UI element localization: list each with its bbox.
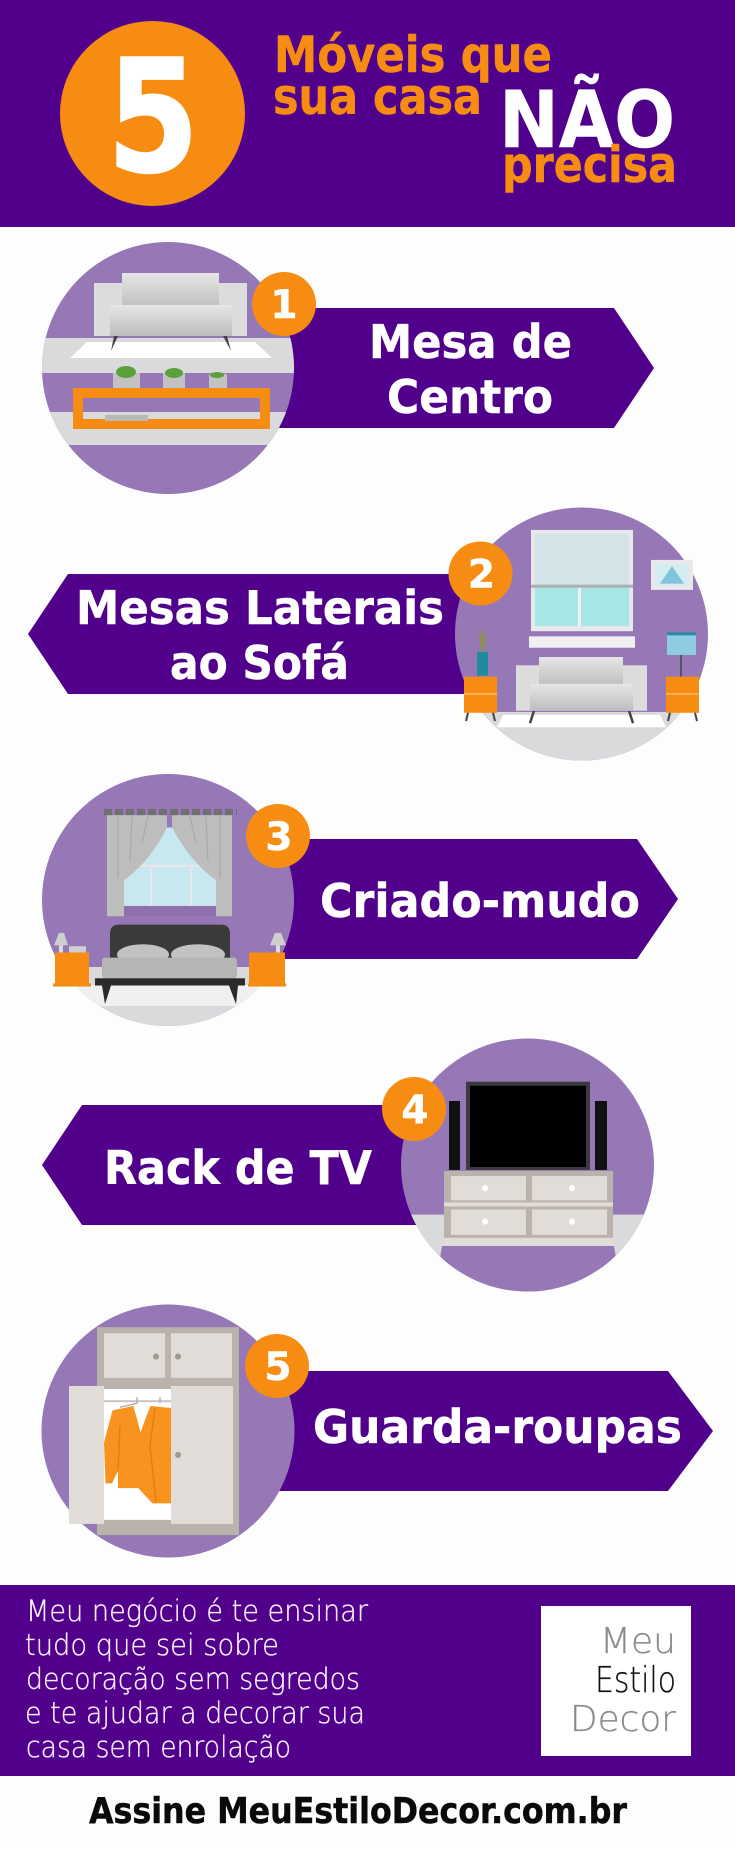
item 1: Mesa de Centro [40, 240, 654, 496]
badge 2: 2 [468, 552, 495, 598]
footer text block: tudo que sei sobre [25, 1628, 279, 1662]
item 4: Rack de TV [42, 1036, 656, 1295]
footer text block [25, 1594, 368, 1764]
arrow label: Guarda-roupas: Guarda-roupas [313, 1400, 682, 1454]
arrow label: Mesa de Centro [200, 308, 654, 428]
arrow label: Mesas Laterais ao Sofá: ao Sofá [170, 636, 349, 690]
call to action: Assine MeuEstiloDecor.com.br [89, 1791, 627, 1832]
arrow label: Mesa de Centro: Mesa de [369, 315, 572, 369]
badge 5 [245, 1334, 309, 1398]
footer text block: decoração sem segredos [26, 1662, 360, 1696]
badge 3 [246, 804, 310, 868]
footer text block: Meu negócio é te ensinar [26, 1594, 368, 1628]
title: Móveis que [274, 26, 552, 84]
badge 1 [252, 272, 316, 336]
title: precisa [502, 136, 677, 194]
footer panel [0, 1585, 735, 1776]
badge 5: 5 [264, 1345, 292, 1390]
illustration: living room with side tables [450, 500, 712, 767]
arrow label: Mesas Laterais ao Sofá: Mesas Laterais [76, 581, 444, 635]
arrow label: Mesa de Centro: Centro [387, 370, 553, 424]
title [273, 26, 677, 194]
badge 2 [448, 542, 512, 606]
item 5: Guarda-roupas [42, 1304, 713, 1558]
illustration: TV and rack [400, 1036, 656, 1295]
item 3: Criado-mudo [40, 770, 678, 1031]
logo: Meu Estilo Decor: Decor [570, 1699, 676, 1740]
arrow label: Criado-mudo: Criado-mudo [320, 874, 640, 928]
logo: Meu Estilo Decor: Meu [600, 1621, 676, 1662]
footer text block: e te ajudar a decorar sua [25, 1696, 365, 1730]
arrow label: Rack de TV [42, 1105, 440, 1225]
footer text block: casa sem enrolação [26, 1730, 291, 1764]
arrow label: Rack de TV: Rack de TV [104, 1141, 372, 1195]
big number circle: 5 [107, 26, 199, 208]
badge 1: 1 [270, 283, 298, 328]
header banner [0, 0, 735, 227]
title: sua casa [273, 68, 482, 126]
badge 3: 3 [265, 815, 293, 860]
illustration: living room with coffee table [40, 240, 296, 496]
illustration: bedroom with nightstands [40, 770, 296, 1031]
arrow label: Mesas Laterais ao Sofá [28, 574, 500, 694]
arrow label: Criado-mudo [200, 839, 678, 959]
badge 4 [382, 1077, 446, 1141]
big number circle [60, 21, 245, 208]
item 2: Mesas Laterais ao Sofá [28, 500, 712, 767]
arrow label: Guarda-roupas [200, 1371, 713, 1491]
logo: Meu Estilo Decor [541, 1606, 691, 1756]
logo: Meu Estilo Decor: Estilo [595, 1660, 676, 1701]
badge 4: 4 [401, 1088, 429, 1133]
title: NÃO [499, 74, 675, 166]
illustration: open wardrobe with jacket [42, 1304, 294, 1558]
